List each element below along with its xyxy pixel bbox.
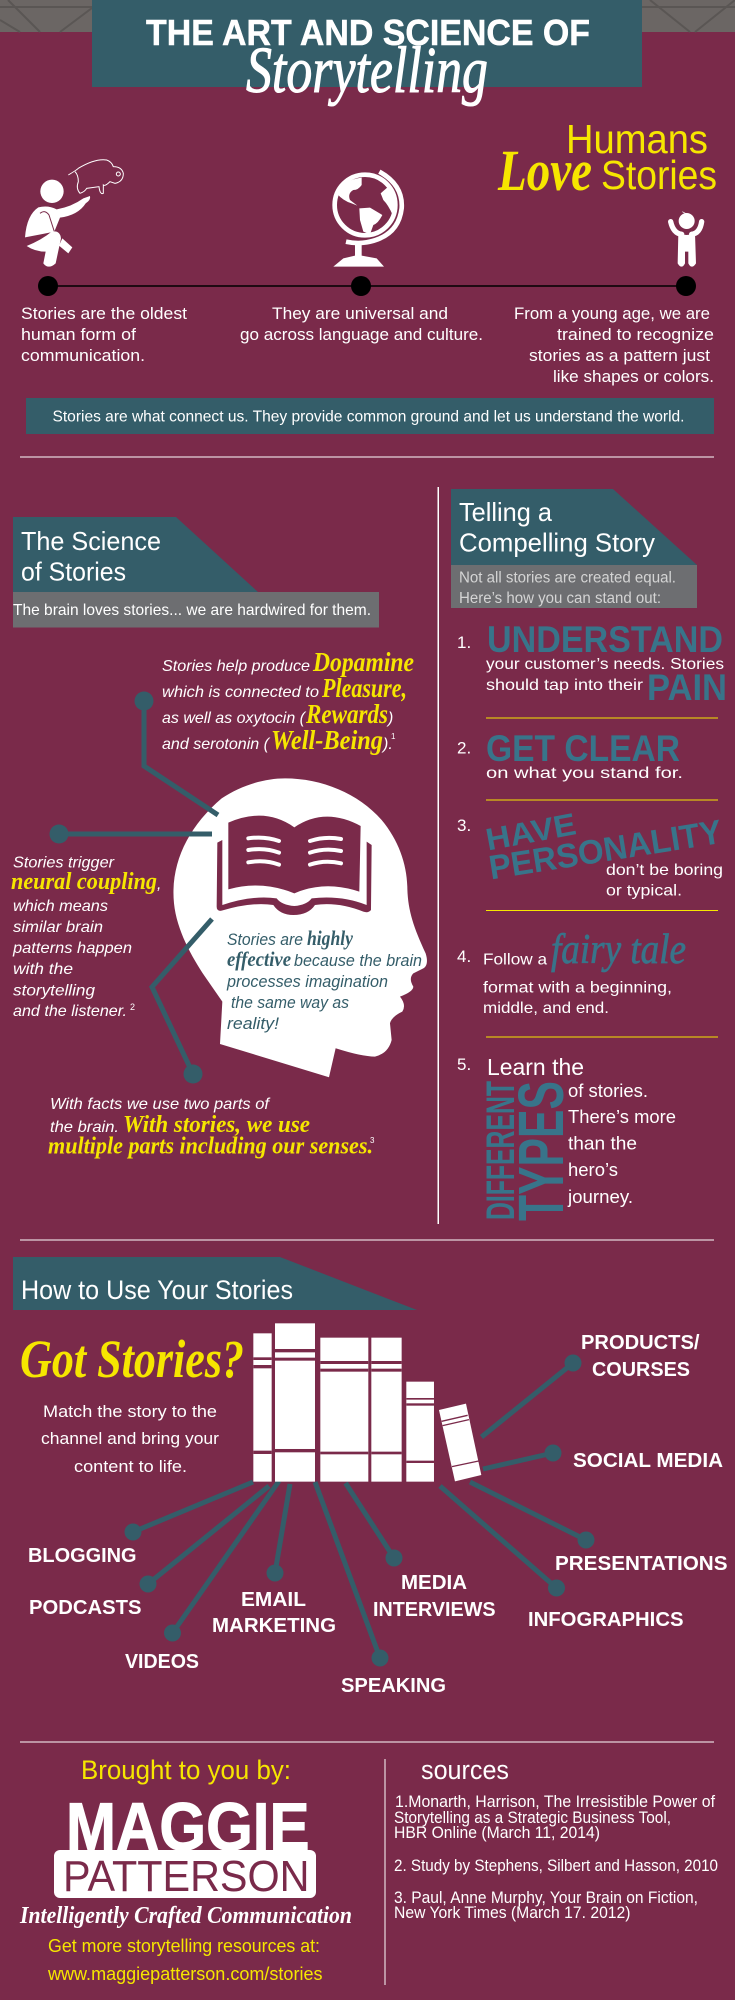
text: source list: Storytelling as a Strategic Business Tool, (394, 1809, 671, 1827)
item 2: get clear: on what you stand for. (486, 765, 683, 782)
labels: channels: EMAIL (241, 1589, 306, 1611)
text: source list: 3. Paul, Anne Murphy, Your Brain on Fiction, (394, 1889, 698, 1907)
text: dopamine: Rewards (305, 699, 388, 729)
text: resources link: www.maggiepatterson.com/stories (47, 1964, 323, 1984)
item 5: different types: of stories. (568, 1081, 648, 1101)
text: neural coupling: storytelling (13, 982, 95, 1000)
labels: channels: PODCASTS (29, 1597, 142, 1619)
text: source list (394, 1793, 718, 1922)
text: source list: New York Times (March 17. 2012) (394, 1904, 630, 1922)
text: dopamine: Well-Being (271, 725, 383, 755)
connectors: channels (124, 1354, 594, 1666)
item 5: different types: TYPES (505, 1081, 577, 1221)
text: neural coupling (11, 854, 161, 1020)
text: neural coupling: Stories trigger (13, 854, 115, 872)
text: match the story: Match the story to the (43, 1402, 217, 1421)
text: highly effective: effective (227, 947, 291, 971)
text: facts and senses: With facts we use two parts of (50, 1096, 271, 1113)
text: match the story (41, 1402, 219, 1476)
tagline: Intelligently Crafted Communication (19, 1903, 352, 1929)
title banner (92, 0, 642, 107)
labels: channels: COURSES (592, 1359, 690, 1381)
item 1: understand (457, 619, 727, 708)
item 4: fairy tale: format with a beginning, (483, 980, 672, 996)
title: the art and science of: THE ART AND SCIENCE OF (146, 12, 590, 53)
labels: channels: PRODUCTS/ (581, 1332, 700, 1354)
text: oldest form (21, 304, 187, 365)
connector: dopamine (134, 692, 218, 815)
text: highly effective: Stories are (227, 930, 303, 949)
text: neural coupling: similar brain (13, 919, 103, 936)
panel: sources (394, 1755, 718, 1922)
title: storytelling script: Storytelling (246, 34, 488, 107)
text: highly effective: highly (307, 926, 354, 950)
labels: channels: INTERVIEWS (373, 1599, 496, 1621)
labels: channels: MARKETING (212, 1615, 336, 1637)
text: facts and senses: With stories, we use (123, 1112, 310, 1138)
heading: telling a compelling story: Telling a (459, 497, 553, 527)
text: dopamine: Dopamine (312, 647, 414, 677)
heading: sources: sources (421, 1755, 509, 1785)
subheading: brain loves stories: The brain loves stories... we are hardwired for them. (13, 602, 371, 619)
text: neural coupling: with the (13, 961, 73, 978)
labels: channels (28, 1332, 728, 1697)
text: young age: stories as a pattern just (529, 346, 710, 365)
callout: stories connect us (26, 398, 714, 434)
text: highly effective: processes imagination (226, 972, 388, 991)
text: facts and senses: 3 (370, 1136, 375, 1145)
text: universal: go across language and culture. (240, 325, 483, 344)
subheading: not all stories: Here’s how you can stand out: (459, 590, 661, 607)
text: highly effective: the same way as (231, 993, 349, 1012)
heading: brought to you by: Brought to you by: (81, 1755, 291, 1785)
item 3: have personality: or typical. (606, 882, 682, 900)
panel: telling a compelling story (451, 489, 727, 1221)
text: highly effective (226, 926, 422, 1033)
item 1: understand: your customer’s needs. Stories (486, 656, 724, 673)
item 5: different types: There’s more (568, 1107, 676, 1127)
item 3: have personality: HAVE (483, 806, 579, 857)
timeline (38, 276, 696, 296)
text: young age (514, 304, 714, 386)
text: neural coupling: , (157, 876, 161, 893)
icon: child with raised arms (671, 212, 702, 267)
text: neural coupling: patterns happen (12, 940, 132, 957)
text: resources link (47, 1936, 323, 1984)
connector: senses (152, 919, 212, 1084)
text: neural coupling: and the listener. (13, 1003, 127, 1020)
item 2: get clear: 2. (457, 738, 471, 758)
text: highly effective: reality! (227, 1014, 279, 1033)
item 4: fairy tale (457, 927, 686, 1017)
callout: stories connect us: Stories are what connect us. They provide common ground and let us understand the world. (52, 408, 684, 426)
item 4: fairy tale: Follow a (483, 951, 547, 968)
heading: how to use your stories: How to Use Your Stories (21, 1275, 293, 1305)
item 5: different types: hero’s (568, 1160, 618, 1180)
item 3: have personality: 3. (457, 816, 471, 835)
text: young age: like shapes or colors. (553, 367, 714, 386)
icon: row of books (253, 1323, 481, 1482)
text: dopamine: ). (381, 736, 393, 753)
heading: humans love stories: Humans (566, 116, 708, 162)
item 1: understand: 1. (457, 633, 471, 652)
item 2: get clear: GET CLEAR (486, 728, 680, 769)
item 5: different types: Learn the (487, 1054, 584, 1080)
text: neural coupling: 2 (130, 1002, 135, 1012)
item 2: get clear (457, 728, 683, 782)
item 4: fairy tale: middle, and end. (483, 1000, 609, 1017)
subheading: not all stories: Not all stories are created equal. (459, 570, 676, 586)
panel: science of stories (11, 517, 427, 1160)
text: source list: 2. Study by Stephens, Silbert and Hasson, 2010 (394, 1857, 718, 1875)
text: match the story: content to life. (74, 1457, 187, 1476)
text: facts and senses: the brain. (50, 1119, 119, 1136)
labels: channels: SOCIAL MEDIA (573, 1450, 723, 1472)
icon: globe (333, 172, 402, 267)
text: dopamine: which is connected to (162, 684, 319, 701)
text: highly effective: because the brain (294, 951, 422, 970)
text: dopamine: Pleasure, (321, 673, 407, 703)
heading: science of stories: The Science (21, 526, 161, 556)
heading: telling a compelling story: Compelling Story (459, 528, 655, 558)
text: oldest form: Stories are the oldest (21, 304, 187, 323)
subheading: brain loves stories (13, 592, 379, 628)
item 5: different types: journey. (567, 1187, 633, 1207)
logo: maggie patterson: MAGGIE (66, 1789, 310, 1865)
item 5: different types: than the (568, 1134, 637, 1154)
text: facts and senses: multiple parts including our senses. (48, 1134, 373, 1160)
logo: maggie patterson: PATTERSON (63, 1852, 310, 1901)
heading: science of stories (13, 517, 258, 592)
labels: channels: INFOGRAPHICS (528, 1609, 684, 1631)
heading: telling a compelling story (451, 489, 697, 565)
item 1: understand: PAIN (647, 667, 727, 708)
text: neural coupling: neural coupling (11, 869, 157, 895)
icon: head with book (173, 778, 427, 1077)
heading: how to use your stories (13, 1257, 417, 1310)
subheading: not all stories (451, 565, 697, 608)
labels: channels: BLOGGING (28, 1545, 136, 1567)
heading: science of stories: of Stories (21, 556, 126, 586)
panel: brought to you by (19, 1755, 352, 1984)
text: dopamine: as well as oxytocin ( (162, 710, 307, 727)
heading: humans love stories (497, 116, 717, 203)
text: universal: They are universal and (272, 304, 448, 323)
item 4: fairy tale: 4. (457, 947, 471, 966)
text: young age: From a young age, we are (514, 304, 710, 323)
item 1: understand: should tap into their (486, 677, 644, 694)
text: dopamine: Stories help produce (162, 658, 310, 675)
text: dopamine: 1 (391, 732, 396, 741)
logo: maggie patterson (54, 1789, 316, 1901)
heading: humans love stories: Love (497, 138, 592, 203)
labels: channels: VIDEOS (125, 1651, 199, 1673)
panel: how to use your stories (13, 1257, 728, 1697)
heading: got stories: Got Stories? (20, 1329, 244, 1389)
item 3: have personality: PERSONALITY (486, 813, 725, 887)
text: neural coupling: which means (13, 898, 108, 915)
text: source list: 1.Monarth, Harrison, The Irresistible Power of (395, 1793, 715, 1811)
text: resources link: Get more storytelling resources at: (48, 1936, 320, 1956)
text: oldest form: human form of (21, 325, 136, 344)
item 3: have personality: don’t be boring (606, 862, 723, 879)
item 5: different types (457, 1054, 676, 1221)
item 4: fairy tale: fairy tale (551, 927, 686, 973)
text: facts and senses (48, 1096, 375, 1160)
text: dopamine: and serotonin ( (162, 736, 271, 753)
icon: cave painter (25, 160, 123, 267)
text: universal (240, 304, 483, 344)
text: match the story: channel and bring your (41, 1429, 219, 1448)
item 5: different types: DIFFERENT (479, 1081, 523, 1220)
text: dopamine (162, 647, 414, 755)
heading: humans love stories: Stories (601, 152, 717, 198)
item 5: different types: 5. (457, 1055, 471, 1074)
connector: neural coupling (50, 824, 212, 844)
labels: channels: SPEAKING (341, 1675, 446, 1697)
labels: channels: MEDIA (401, 1572, 467, 1594)
text: dopamine: ) (386, 710, 393, 727)
text: source list: HBR Online (March 11, 2014) (394, 1824, 600, 1842)
text: oldest form: communication. (21, 346, 145, 365)
labels: channels: PRESENTATIONS (555, 1553, 728, 1575)
text: young age: trained to recognize (557, 325, 714, 344)
